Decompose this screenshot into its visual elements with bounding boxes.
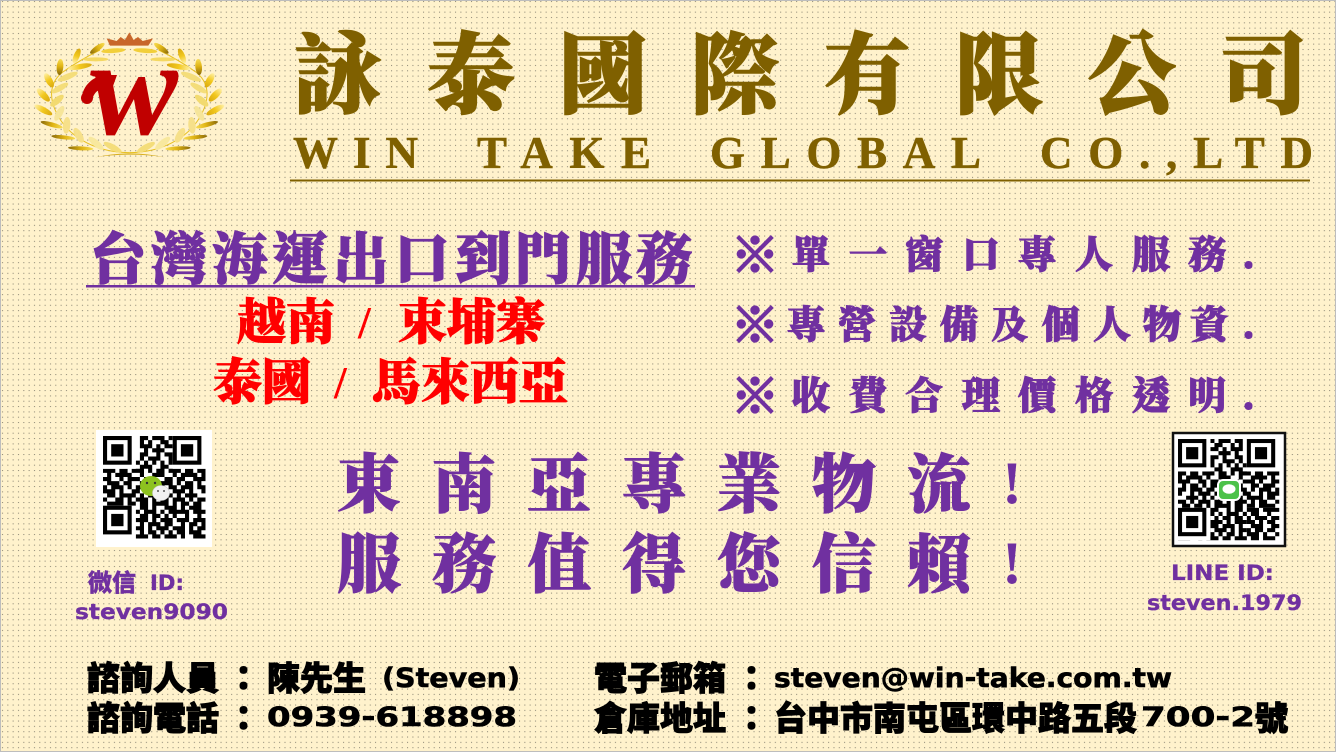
contact person	[87, 652, 520, 700]
heading underline	[86, 285, 695, 288]
LINE QR code	[1173, 433, 1285, 546]
warehouse address: 號	[1255, 692, 1288, 740]
warehouse address	[594, 692, 1288, 740]
logo: laurel wreath with crown and W: w	[90, 11, 179, 164]
slogan line 1: 東南亞專業物流	[337, 434, 972, 526]
title: company name in English: TAKE	[477, 128, 651, 178]
email	[594, 652, 1172, 700]
bullet 3: ※	[731, 357, 779, 427]
icon: WeChat	[140, 476, 170, 500]
destination line 1: 越南	[237, 284, 335, 354]
contact person: (Steven)	[382, 663, 520, 694]
destination line 2: /	[333, 357, 348, 408]
bullet list of service features	[731, 216, 1255, 427]
contact person: ：	[227, 652, 260, 700]
title: company name in English	[293, 128, 1313, 178]
bullet 3	[731, 357, 1255, 427]
contact details	[87, 652, 1288, 740]
email: ：	[735, 652, 768, 700]
warehouse address: 台中市南屯區環中路五段	[774, 692, 1137, 740]
bullet 1: ※	[731, 216, 779, 286]
WeChat ID label: 微信	[88, 563, 136, 598]
bullet 1	[731, 216, 1255, 286]
warehouse address: 700-2	[1141, 702, 1255, 733]
email: 電子郵箱	[594, 652, 726, 700]
slogan line 2: 服務值得您信賴	[337, 514, 976, 606]
logo swash on the w	[81, 75, 117, 104]
destination line 1: 束埔寨	[398, 284, 545, 354]
slogan	[337, 434, 1022, 606]
destination line 2: 泰國	[213, 344, 311, 414]
WeChat ID label	[75, 563, 228, 624]
bullet 3: 收費合理價格透明.	[792, 365, 1255, 420]
destination line 1: /	[357, 297, 372, 348]
LINE ID label: steven.1979	[1147, 591, 1302, 615]
WeChat ID label: steven9090	[75, 600, 228, 624]
warehouse address: 倉庫地址	[594, 692, 726, 740]
WeChat QR code	[96, 430, 212, 547]
title: company name in English: GLOBAL	[710, 128, 981, 178]
heading: Taiwan sea freight door-to-door service: 台灣海運出口到門服務	[90, 216, 692, 296]
destination line 1	[237, 284, 545, 354]
title underline	[290, 180, 1310, 182]
destination line 2	[213, 344, 568, 414]
phone: ：	[227, 692, 260, 740]
title: company name in English: CO.,LTD	[1040, 128, 1313, 178]
icon: LINE	[1218, 480, 1240, 500]
phone: 0939-618898	[267, 702, 517, 733]
phone	[87, 692, 517, 740]
slogan line 2: !	[1002, 530, 1022, 596]
LINE ID label: LINE ID:	[1171, 561, 1274, 585]
bullet 1: 單一窗口專人服務.	[792, 224, 1255, 279]
logo: laurel wreath with crown and W	[33, 11, 226, 164]
title: company name in English: WIN	[293, 128, 418, 178]
destination line 2: 馬來西亞	[372, 344, 568, 414]
slogan line 1: !	[1002, 450, 1022, 516]
WeChat ID label: ID:	[150, 571, 184, 595]
email: steven@win-take.com.tw	[774, 663, 1172, 694]
LINE ID label	[1147, 561, 1302, 615]
phone: 諮詢電話	[87, 692, 219, 740]
title: company name in Chinese: 詠泰國際有限公司	[294, 6, 1308, 132]
bullet 2: ※	[731, 286, 779, 356]
contact person: 諮詢人員	[87, 652, 219, 700]
warehouse address: ：	[735, 692, 768, 740]
contact person: 陳先生	[267, 652, 366, 700]
bullet 2: 專營設備及個人物資.	[787, 294, 1255, 349]
